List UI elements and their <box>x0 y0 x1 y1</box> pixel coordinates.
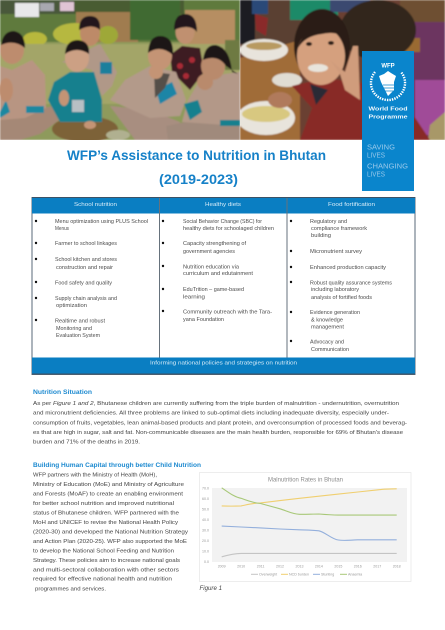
column: Healthy diets items <box>162 219 274 323</box>
x axis labels: 2013 <box>296 564 304 568</box>
column: School nutrition items: Evaluation System <box>56 333 100 339</box>
logo tagline: CHANGING <box>367 164 408 170</box>
column: Food fortification items: Advocacy and <box>310 340 344 346</box>
column: School nutrition items: optimization <box>56 303 87 309</box>
chart legend: Anaemia <box>348 572 362 576</box>
chart legend: NCD burden <box>289 572 309 576</box>
column: Food fortification items: Communication <box>311 347 349 353</box>
logo wordmark <box>368 106 408 120</box>
column: Healthy diets items: yana Foundation <box>183 317 224 323</box>
column: Food fortification items: Enhanced production capacity <box>310 265 386 271</box>
chart legend <box>251 572 362 576</box>
paragraph: building human capital: Ministry of Education (MoE) and Ministry of Agriculture <box>33 482 185 488</box>
chart legend: Stunting <box>321 572 334 576</box>
table: WFP assistance pillars <box>32 198 415 374</box>
logo wordmark: Programme <box>368 114 408 120</box>
column: School nutrition items: construction and repair <box>56 265 113 271</box>
column: Food fortification items <box>290 219 392 353</box>
paragraph: building human capital: Strategy. These policies aim to increase national goals <box>33 558 180 564</box>
column: Healthy diets items: Social Behavior Change (SBC) for <box>183 219 262 225</box>
paragraph: nutrition situation <box>33 401 407 446</box>
column: Food fortification items: management <box>311 324 344 330</box>
title: WFP’s Assistance to Nutrition in Bhutan <box>67 147 326 163</box>
x axis labels: 2011 <box>257 564 264 568</box>
column: School nutrition items: Supply chain analysis and <box>55 296 117 302</box>
column: School nutrition items <box>35 219 148 339</box>
column: Food fortification items: Micronutrient survey <box>310 249 362 255</box>
title <box>67 147 326 187</box>
header: School nutrition: School nutrition <box>74 202 117 208</box>
heading: Nutrition Situation: Nutrition Situation <box>33 389 92 396</box>
paragraph: building human capital: MoH and UNICEF to revise the National Health Policy <box>33 520 178 526</box>
paragraph: building human capital: required for effective national health and nutrition <box>33 577 172 583</box>
column: Healthy diets items: EduTrition – game-based <box>183 287 244 293</box>
column: Food fortification items: & knowledge <box>311 318 343 324</box>
column: School nutrition items: Menu optimization using PLUS School <box>55 219 148 225</box>
logo tagline: LIVES <box>367 152 385 160</box>
column: Healthy diets items: healthy diets for schoolaged children <box>183 226 274 232</box>
paragraph: nutrition situation: es that are high in sugar, salt and fat. Non-communicable diseases are the main health burden, responsible for 69% of Bhutan's disease <box>33 430 404 436</box>
column: School nutrition items: School kitchen and stores <box>55 257 117 263</box>
paragraph: building human capital: WFP partners with the Ministry of Health (MoH), <box>33 472 157 478</box>
x axis labels: 2010 <box>237 564 245 568</box>
paragraph: building human capital: and Action Plan (2020-25). WFP also supported the MoE <box>33 539 187 545</box>
column: Healthy diets items: Capacity strengthening of <box>183 241 246 247</box>
paragraph: nutrition situation: burden and 71% of the deaths in 2019. <box>33 440 140 446</box>
paragraph: building human capital: programmes and services. <box>35 586 106 592</box>
column: Healthy diets items: curriculum and edutainment <box>183 271 253 277</box>
x axis labels: 2012 <box>276 564 284 568</box>
logo tagline: SAVING <box>367 144 395 152</box>
table footer: informing national policies: Informing national policies and strategies on nutrition <box>150 361 297 367</box>
column: Food fortification items: Robust quality assurance systems <box>310 280 392 286</box>
series: Overweight <box>222 553 397 557</box>
x axis labels: 2014 <box>315 564 323 568</box>
column: Food fortification items: analysis of fortified foods <box>311 295 372 301</box>
paragraph: building human capital: status of Bhutanese children. WFP partnered with the <box>33 510 180 516</box>
paragraph: building human capital: and multi-sectoral collaboration with other sectors <box>33 567 179 573</box>
column: Healthy diets items: learning <box>183 294 205 300</box>
x axis labels: 2009 <box>218 564 226 568</box>
paragraph: building human capital <box>33 472 188 592</box>
column: School nutrition items: Monitoring and <box>56 326 92 332</box>
column: Healthy diets items: government agencies <box>183 249 235 255</box>
paragraph: nutrition situation: consumption of fruits, vegetables, lean animal-based products and plant protein, and overconsumption of processed foods and beverag- <box>33 420 407 426</box>
column: School nutrition items: Menus <box>55 226 69 232</box>
column: Food fortification items: including laboratory <box>311 287 359 293</box>
paragraph: nutrition situation: and micronutrient deficiencies. All three problems are linked to sub-optimal diets including inadequate diversity, especially under- <box>33 410 389 416</box>
y axis labels: 30.0 <box>202 528 209 532</box>
paragraph: building human capital: for better school nutrition and improved nutritional <box>33 501 174 507</box>
series: Stunting <box>222 526 397 540</box>
column: Food fortification items: compliance framework <box>311 226 367 232</box>
column: School nutrition items: Farmer to school linkages <box>55 241 117 247</box>
paragraph: nutrition situation: As per Figure 1 and 2 , Bhutanese children are currently suffering from the triple burden of malnutrition - undernutrition, overnutrition <box>33 401 399 407</box>
y axis labels: 60.0 <box>202 497 209 501</box>
figure caption: Figure 1 <box>200 586 222 592</box>
logo tagline: LIVES <box>367 172 385 178</box>
column: Food fortification items: Evidence generation <box>310 310 360 316</box>
logo tagline <box>367 144 408 178</box>
heading: Building Human Capital: Building Human Capital through better Child Nutrition <box>33 462 201 469</box>
y axis labels: 20.0 <box>202 539 209 543</box>
x axis labels: 2017 <box>373 564 381 568</box>
x axis labels: 2018 <box>393 564 401 568</box>
x axis labels: 2015 <box>334 564 342 568</box>
y axis labels: 10.0 <box>202 550 209 554</box>
y axis labels: 40.0 <box>202 518 209 522</box>
paragraph: building human capital: (2020-30) and developed the National Nutrition Strategy <box>33 529 188 535</box>
WFP logo emblem: WFP <box>381 64 395 70</box>
x axis labels: 2016 <box>354 564 362 568</box>
header: Healthy diets: Healthy diets <box>205 202 241 208</box>
chart legend: Overweight <box>259 572 277 576</box>
column: Healthy diets items: Nutrition education via <box>183 264 240 270</box>
series: Anaemia <box>222 488 397 515</box>
paragraph: building human capital: and Forests (MoAF) to create an enabling environment <box>33 492 183 498</box>
photo: schoolchildren sitting on grass <box>0 0 240 142</box>
logo wordmark: World Food <box>368 106 408 112</box>
column: School nutrition items: Realtime and robust <box>55 318 105 324</box>
column: School nutrition items: Food safety and quality <box>55 280 112 286</box>
x axis labels <box>218 564 401 568</box>
chart title: Malnutrition Rates in Bhutan <box>268 476 344 483</box>
y axis labels: 0.0 <box>204 560 209 564</box>
photo: girl eating at a table <box>237 0 445 140</box>
y axis labels: 50.0 <box>202 508 209 512</box>
y axis labels <box>202 486 209 564</box>
y axis labels: 70.0 <box>202 486 209 490</box>
WFP logo panel <box>362 51 414 191</box>
column: Food fortification items: Regulatory and <box>310 219 347 225</box>
column: Healthy diets items: Community outreach with the Tara- <box>183 310 272 316</box>
series: NCD burden <box>222 489 397 506</box>
paragraph: building human capital: to develop the National School Feeding and Nutrition <box>33 548 174 554</box>
title: (2019-2023) <box>159 171 238 187</box>
line chart: Malnutrition Rates in Bhutan <box>200 472 411 582</box>
header: Food fortification: Food fortification <box>328 202 375 208</box>
column: Food fortification items: building <box>311 233 331 239</box>
